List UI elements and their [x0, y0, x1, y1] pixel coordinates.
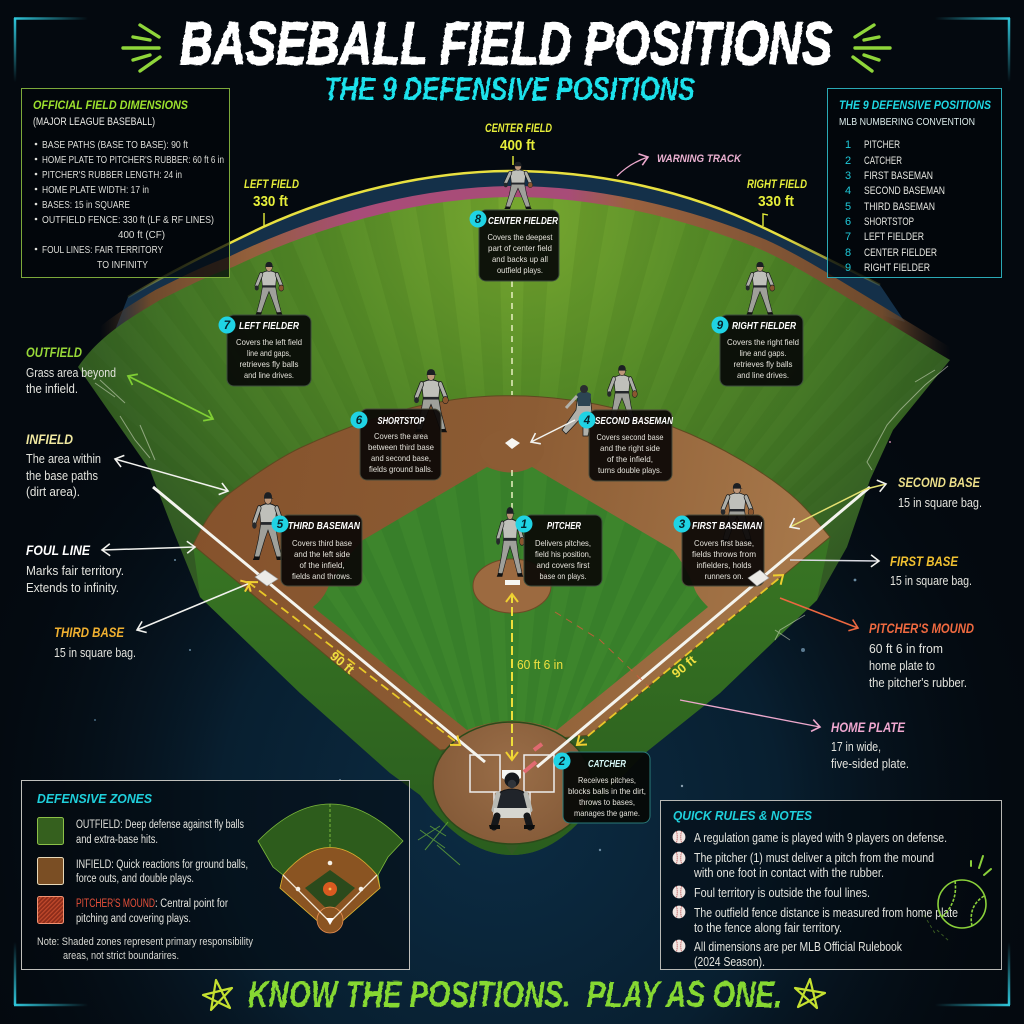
panel: defensive zones [22, 780, 410, 970]
callout: first base: 15 in square bag. [890, 573, 972, 588]
card description: Delivers pitches, [535, 538, 591, 548]
callout: warning track: WARNING TRACK [657, 153, 742, 165]
callout: third base: 15 in square bag. [54, 645, 136, 660]
label: right field distance: 330 ft [758, 193, 794, 210]
player: right fielder [746, 262, 775, 315]
label: right field distance: RIGHT FIELD [747, 179, 807, 191]
card description: blocks balls in the dirt, [568, 786, 646, 796]
callout: infield [26, 432, 228, 499]
note: areas, not strict boundarires. [63, 950, 179, 962]
panel subheading: (MAJOR LEAGUE BASEBALL) [33, 116, 155, 128]
callout: outfield: the infield. [26, 381, 78, 396]
callout: pitcher's mound: 60 ft 6 in from [869, 641, 943, 656]
callout: home plate: HOME PLATE [831, 720, 906, 735]
pitcher's rubber [505, 580, 520, 585]
position card: first baseman [674, 515, 764, 586]
callout: infield: (dirt area). [26, 484, 80, 499]
callout: foul line: FOUL LINE [26, 543, 91, 558]
player: third baseman [252, 492, 284, 560]
label: left field distance: LEFT FIELD [244, 179, 299, 191]
dimensions list: OUTFIELD FENCE: 330 ft (LF & RF LINES) [42, 214, 214, 226]
card description: fields ground balls. [369, 464, 433, 474]
card description: Covers the deepest [488, 232, 553, 242]
pitch path [555, 612, 650, 688]
legend text: pitcher's mound: pitching and covering plays. [76, 913, 191, 925]
position numbers: 8 [845, 247, 851, 259]
third base path [248, 582, 460, 745]
first base bag over card [748, 570, 769, 586]
position card: second baseman [578, 410, 674, 481]
position card: left fielder [218, 315, 311, 386]
card description: and line drives. [244, 370, 294, 380]
outfield grass [78, 197, 950, 855]
rules text: A regulation game is played with 9 players on defense. [694, 831, 947, 845]
card description [368, 431, 434, 474]
legend text: pitcher's mound [76, 898, 228, 925]
card description [596, 432, 664, 475]
foul side grass strips [193, 537, 830, 855]
infield mowing stripes [190, 400, 834, 860]
callout: first base [790, 554, 972, 588]
card description: retrieves fly balls [734, 359, 792, 369]
panel: the 9 defensive positions [828, 88, 1002, 278]
second base cutout [480, 429, 544, 471]
first base path [577, 575, 783, 745]
dimensions list: BASES: 15 in SQUARE [42, 199, 130, 211]
card description: infielders, holds [696, 560, 752, 570]
panel: quick rules and notes [660, 800, 1002, 970]
card title: THIRD BASEMAN [288, 521, 361, 532]
card description: and line drives. [737, 370, 789, 380]
position numbers: 6 [845, 216, 851, 228]
card description: field his position, [535, 549, 591, 559]
legend text: outfield: and extra-base hits. [76, 834, 158, 846]
callout: second base: SECOND BASE [898, 475, 981, 490]
card description: base on plays. [540, 571, 586, 581]
position card: catcher [554, 752, 650, 823]
card description: throws to bases, [579, 797, 635, 807]
card description: of the infield, [300, 560, 344, 570]
card title: CATCHER [588, 759, 627, 770]
panel subheading: MLB NUMBERING CONVENTION [839, 116, 975, 128]
card description: runners on. [704, 571, 744, 581]
dimensions list: BASE PATHS (BASE TO BASE): 90 ft [42, 139, 188, 151]
card description: Covers the area [374, 431, 428, 441]
rules text: The outfield fence distance is measured from home plate [694, 906, 958, 920]
rules text: to the fence along fair territory. [694, 921, 842, 935]
callout: home plate: 17 in wide, [831, 739, 881, 754]
card description: of the infield, [607, 454, 653, 464]
player: shortstop [414, 369, 448, 432]
icon: right star [795, 979, 825, 1008]
card description: outfield plays. [497, 265, 543, 275]
card description: Covers third base [292, 538, 352, 548]
callout: pitcher's mound: the pitcher's rubber. [869, 675, 967, 690]
card description: and covers first [536, 560, 590, 570]
position names: RIGHT FIELDER [864, 262, 930, 274]
dimensions list: HOME PLATE TO PITCHER'S RUBBER: 60 ft 6 in [42, 154, 224, 166]
subtitle: THE 9 DEFENSIVE POSITIONS [324, 71, 696, 107]
label: 90 ft left: 90 ft [327, 648, 358, 677]
callout: foul line [26, 543, 195, 595]
callout: infield: The area within [26, 451, 101, 466]
number badge 1: 1 [521, 519, 527, 531]
callout: home plate [680, 700, 909, 771]
legend text: infield [76, 859, 248, 885]
card description [727, 337, 799, 380]
legend text: pitcher's mound: PITCHER'S MOUND [76, 898, 155, 910]
card description [292, 538, 352, 581]
position card: right fielder [712, 315, 803, 386]
label: left field distance: 330 ft [253, 193, 288, 210]
card description: retrieves fly balls [240, 359, 298, 369]
position numbers: 5 [845, 201, 851, 213]
position names: SECOND BASEMAN [864, 185, 945, 197]
label: right field distance [747, 179, 807, 226]
number badge 3: 3 [679, 519, 686, 531]
position names: LEFT FIELDER [864, 231, 924, 243]
position numbers: 9 [845, 262, 851, 274]
position card: third baseman [272, 515, 362, 586]
position card: shortstop [350, 409, 441, 480]
card description: part of center field [488, 243, 552, 253]
number badge 6: 6 [356, 415, 363, 427]
legend text: infield: INFIELD: Quick reactions for ground balls, [76, 859, 248, 871]
decorative sketch marks along the outfield edge [95, 366, 948, 640]
callout: infield: the base paths [26, 468, 98, 483]
card title: PITCHER [547, 521, 582, 532]
panel heading: THE 9 DEFENSIVE POSITIONS [839, 98, 991, 112]
position numbers: 1 [845, 139, 851, 151]
panel heading: OFFICIAL FIELD DIMENSIONS [33, 98, 188, 112]
dimensions list: PITCHER'S RUBBER LENGTH: 24 in [42, 169, 182, 181]
player: second baseman [607, 365, 637, 424]
note [37, 936, 253, 962]
position card: center fielder [470, 210, 559, 281]
card description [236, 337, 302, 380]
callout: first base: FIRST BASE [890, 554, 959, 569]
position card: pitcher [516, 515, 602, 586]
player: pitcher [496, 507, 524, 577]
card title: CENTER FIELDER [488, 216, 559, 227]
position numbers: 7 [845, 231, 851, 243]
decorative sketch near home plate [418, 822, 460, 865]
pitcher's mound [473, 559, 551, 613]
callout: pitcher's mound: PITCHER'S MOUND [869, 621, 974, 636]
position names [864, 139, 945, 274]
callout: outfield [26, 345, 213, 419]
dimensions list: HOME PLATE WIDTH: 17 in [42, 184, 149, 196]
card description [535, 538, 591, 581]
callout: outfield: OUTFIELD [26, 345, 82, 360]
dimensions list: 400 ft (CF) [118, 229, 165, 241]
callout: third base: THIRD BASE [54, 625, 125, 640]
card description: and backs up all [492, 254, 548, 264]
card description: fields throws from [692, 549, 756, 559]
callout: pitcher's mound: home plate to [869, 658, 935, 673]
player: catcher [489, 772, 535, 829]
card description [568, 775, 646, 818]
player: left fielder [255, 262, 284, 315]
card description: Receives pitches, [578, 775, 636, 785]
pink pointer at plate [524, 744, 542, 772]
number badge 9: 9 [717, 320, 724, 332]
card description: line and gaps. [740, 348, 786, 358]
label: left field distance [244, 179, 299, 226]
mowing stripes [526, 209, 532, 210]
fence line [128, 171, 880, 297]
third base bag [255, 570, 278, 586]
card title: LEFT FIELDER [239, 321, 300, 332]
position numbers [845, 139, 851, 274]
card description: manages the game. [574, 808, 640, 818]
callout: foul line: Extends to infinity. [26, 580, 119, 595]
card description: Covers the right field [727, 337, 799, 347]
card description: between third base [368, 442, 434, 452]
card description: turns double plays. [598, 465, 662, 475]
card description [692, 538, 756, 581]
position names: SHORTSTOP [864, 216, 914, 228]
position names: CENTER FIELDER [864, 247, 937, 259]
panel: official field dimensions [22, 88, 230, 278]
batter's boxes [470, 755, 554, 826]
second base bag [505, 438, 520, 449]
position names: FIRST BASEMAN [864, 170, 933, 182]
footer slogan: KNOW THE POSITIONS. PLAY AS ONE. [248, 974, 782, 1015]
rules text: The pitcher (1) must deliver a pitch from the mound [694, 851, 934, 865]
infield grass [313, 467, 708, 730]
legend text: pitcher's mound: : Central point for [155, 898, 228, 910]
card title: RIGHT FIELDER [732, 321, 797, 332]
label: 60 ft 6 in: 60 ft 6 in [517, 658, 563, 672]
card description: line and gaps, [247, 348, 291, 358]
panel heading: DEFENSIVE ZONES [37, 791, 152, 806]
dimensions list [35, 139, 224, 271]
card description: fields and throws. [292, 571, 352, 581]
rules text [693, 831, 958, 969]
position names: THIRD BASEMAN [864, 201, 935, 213]
player: first baseman [721, 483, 754, 542]
player: runner near second [562, 385, 592, 436]
number badge 7: 7 [224, 320, 231, 332]
position names: CATCHER [864, 155, 902, 167]
position numbers: 2 [845, 155, 851, 167]
rules text: All dimensions are per MLB Official Rulebook [694, 940, 903, 954]
card description [488, 232, 553, 275]
icon: right title burst [853, 25, 890, 71]
legend text: outfield: OUTFIELD: Deep defense against fly balls [76, 819, 244, 831]
warning track [78, 197, 950, 367]
dimensions list: TO INFINITY [97, 259, 148, 271]
icon: left star [203, 980, 232, 1010]
rules text: (2024 Season). [694, 955, 765, 969]
legend text: infield: force outs, and double plays. [76, 873, 194, 885]
rules text: Foul territory is outside the foul lines. [694, 886, 870, 900]
rules text: with one foot in contact with the rubber. [693, 866, 884, 880]
icon: green sketched baseball [924, 856, 991, 942]
callout: pitcher's mound [780, 598, 974, 690]
card title: SHORTSTOP [378, 416, 425, 427]
card description: Covers second base [596, 432, 664, 442]
number badge 8: 8 [475, 214, 482, 226]
pitching distance [511, 594, 513, 760]
position names: PITCHER [864, 139, 900, 151]
icon: baseball bullets [673, 831, 685, 952]
number badge 4: 4 [583, 415, 591, 427]
card description: Covers the left field [236, 337, 302, 347]
baseball field [78, 170, 950, 855]
position numbers: 3 [845, 170, 851, 182]
card description: Covers first base, [694, 538, 754, 548]
callout: foul line: Marks fair territory. [26, 563, 124, 578]
number badge 2: 2 [558, 756, 566, 768]
home plate [502, 770, 521, 784]
icon: left title burst [123, 25, 160, 71]
callout: second base [790, 475, 982, 527]
card description: and the left side [294, 549, 350, 559]
label: center field distance: 400 ft [500, 137, 535, 154]
swatch: outfield [38, 818, 64, 844]
position numbers: 4 [845, 185, 851, 197]
center dashed line [511, 281, 513, 510]
field measurements [248, 575, 783, 772]
home plate dirt [433, 722, 591, 844]
callout: infield: INFIELD [26, 432, 73, 447]
arrow: second base pointer [531, 420, 575, 442]
dimensions list: FOUL LINES: FAIR TERRITORY [42, 244, 163, 256]
swatch: pitcher's mound [38, 896, 64, 924]
panel heading: QUICK RULES & NOTES [673, 808, 812, 823]
callout: outfield: Grass area beyond [26, 365, 116, 380]
player: center fielder [504, 162, 533, 209]
outfield fence and navy track band [112, 171, 905, 338]
card title: FIRST BASEMAN [692, 521, 763, 532]
title: BASEBALL FIELD POSITIONS [180, 10, 832, 77]
label: 90 ft right: 90 ft [669, 652, 699, 681]
mini field diagram [258, 804, 403, 933]
card description: and the right side [600, 443, 660, 453]
callout: warning track [617, 153, 742, 176]
card title: SECOND BASEMAN [595, 416, 674, 427]
label: center field distance: CENTER FIELD [485, 123, 552, 135]
callout: home plate: five-sided plate. [831, 756, 909, 771]
card description: and second base, [371, 453, 431, 463]
swatch: infield [38, 858, 64, 884]
callout: second base: 15 in square bag. [898, 495, 982, 510]
first base bag [748, 570, 769, 586]
label: center field distance [485, 123, 552, 165]
callout: third base [54, 583, 250, 660]
note: Note: Shaded zones represent primary responsibility [37, 936, 253, 948]
foul lines [153, 487, 870, 767]
number badge 5: 5 [277, 519, 284, 531]
legend text: outfield [76, 819, 244, 846]
infield dirt [193, 396, 830, 750]
